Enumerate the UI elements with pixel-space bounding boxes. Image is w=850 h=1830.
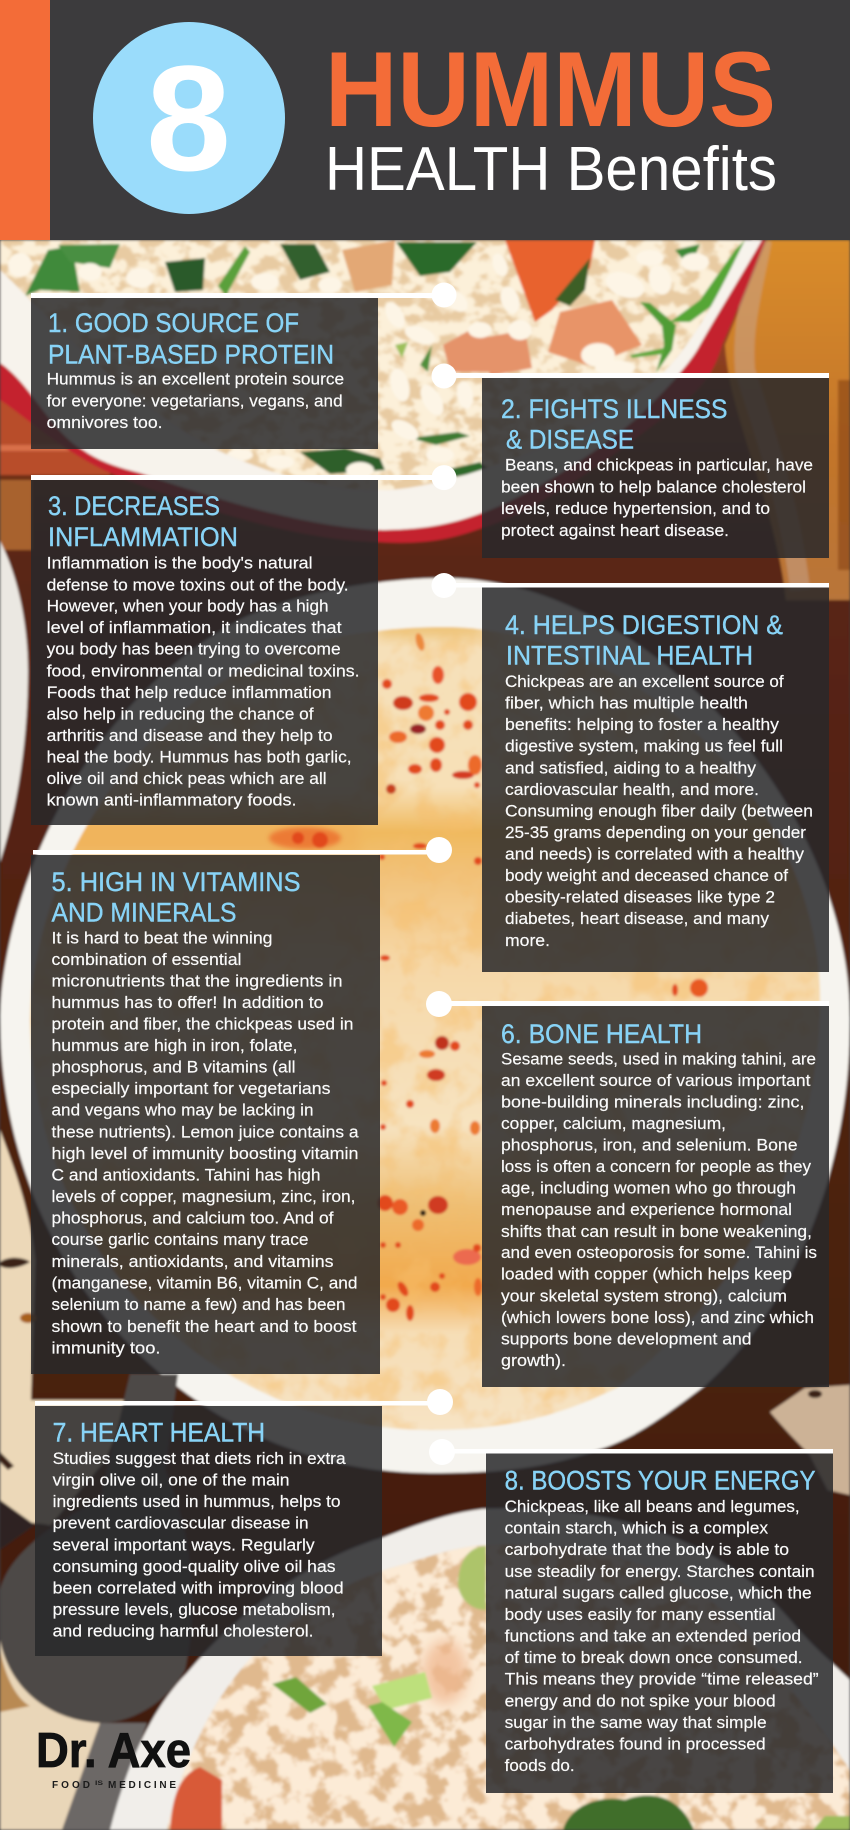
body text	[501, 1049, 817, 1370]
body text: especially important for vegetarians	[52, 1079, 330, 1098]
heading	[48, 491, 238, 552]
body text: levels of copper, magnesium, zinc, iron,	[52, 1187, 356, 1206]
body text: combination of essential	[52, 950, 241, 969]
logo: Dr. Axe food is medicine: FOOD	[52, 1780, 90, 1791]
body text: also help in reducing the chance of	[47, 704, 314, 723]
panel 3: decreases inflammation	[31, 465, 456, 825]
body text: However, when your body has a high	[47, 597, 329, 616]
heading: INFLAMMATION	[48, 522, 238, 552]
body text: minerals, antioxidants, and vitamins	[52, 1252, 334, 1271]
body text	[501, 456, 813, 540]
panel background	[31, 298, 378, 449]
title: HUMMUS: HUMMUS	[325, 29, 776, 149]
scallions	[272, 1677, 327, 1713]
body text: body weight and deceased chance of	[505, 866, 788, 885]
orange side bar	[0, 0, 50, 240]
body text: these nutrients). Lemon juice contains a	[52, 1122, 359, 1141]
body text: hummus are high in iron, folate,	[52, 1036, 298, 1055]
body text: pressure levels, glucose metabolism,	[53, 1600, 336, 1619]
body text: carbohydrate that the body is able to	[505, 1540, 789, 1559]
paprika flakes	[292, 632, 708, 1321]
body text: use steadily for energy. Starches contain	[505, 1562, 815, 1581]
body text: C and antioxidants. Tahini has high	[52, 1165, 320, 1184]
heading	[505, 610, 783, 671]
body text: growth).	[501, 1351, 566, 1370]
body text: of time to break down once consumed.	[505, 1648, 803, 1667]
body text: selenium to name a few) and has been	[52, 1295, 346, 1314]
body text: micronutrients that the ingredients in	[52, 971, 342, 990]
body text	[505, 1497, 819, 1775]
body text: menopause and experience hormonal	[501, 1200, 792, 1219]
body text: obesity-related diseases like type 2	[505, 888, 775, 907]
body text: contain starch, which is a complex	[505, 1518, 769, 1537]
body text: and satisfied, aiding to a healthy	[505, 758, 757, 777]
body text	[53, 1449, 346, 1641]
body text: functions and take an extended period	[505, 1626, 801, 1645]
panel background	[31, 480, 378, 825]
body text: protein and fiber, the chickpeas used in	[52, 1014, 354, 1034]
body text: body uses easily for many essential	[505, 1605, 776, 1624]
body text: immunity too.	[52, 1339, 160, 1358]
connector line and dot	[31, 465, 456, 490]
body text: 25-35 grams depending on your gender	[505, 823, 806, 842]
heading: 8. BOOSTS YOUR ENERGY	[505, 1466, 816, 1496]
body text: been shown to help balance cholesterol	[501, 478, 806, 496]
body text: Sesame seeds, used in making tahini, are	[501, 1049, 816, 1068]
body text: bone-building minerals including: zinc,	[501, 1092, 804, 1112]
body text: sugar in the same way that simple	[505, 1713, 767, 1732]
left red wood	[0, 400, 110, 550]
body text: course garlic contains many trace	[52, 1230, 308, 1249]
panel background	[486, 1453, 833, 1793]
body text: hummus has to offer! In addition to	[52, 993, 324, 1012]
panel background	[482, 587, 829, 972]
connector line and dot	[432, 364, 829, 388]
body text: and needs) is correlated with a healthy	[505, 844, 805, 864]
panel 4: helps digestion and intestinal health	[432, 573, 829, 972]
body text: several important ways. Regularly	[53, 1535, 315, 1554]
amber jar	[725, 240, 850, 600]
hummus bowl	[0, 578, 850, 1473]
body text: and reducing harmful cholesterol.	[53, 1622, 314, 1641]
body text	[47, 370, 344, 432]
body text: foods do.	[505, 1756, 575, 1775]
body text: It is hard to beat the winning	[52, 928, 272, 947]
body text: level of inflammation, it indicates that	[47, 618, 342, 637]
body text: high level of immunity boosting vitamin	[52, 1144, 358, 1163]
pita bread left	[0, 1130, 130, 1530]
body text: Foods that help reduce inflammation	[47, 683, 332, 702]
body text: (which lowers bone loss), and zinc which	[501, 1308, 814, 1327]
heading: 3. DECREASES	[48, 491, 220, 521]
connector line and dot	[429, 1439, 833, 1465]
body text: Beans, and chickpeas in particular, have	[505, 456, 813, 475]
panel background	[482, 1006, 829, 1387]
panel background	[31, 855, 380, 1374]
body text: heal the body. Hummus has both garlic,	[47, 748, 352, 766]
body text: protect against heart disease.	[501, 521, 729, 540]
body text: cardiovascular health, and more.	[505, 780, 759, 799]
heading: INTESTINAL HEALTH	[506, 641, 753, 671]
header background	[0, 0, 850, 240]
heading: 1. GOOD SOURCE OF	[48, 308, 299, 338]
number circle with 8	[93, 22, 285, 214]
body text: virgin olive oil, one of the main	[53, 1470, 290, 1489]
body text: you body has been trying to overcome	[47, 640, 341, 659]
heading: AND MINERALS	[52, 898, 236, 928]
body text: fiber, which has multiple health	[505, 694, 748, 713]
body text: loaded with copper (which helps keep	[501, 1265, 792, 1284]
couscous bowl	[110, 1509, 850, 1830]
body text: and even osteoporosis for some. Tahini is	[501, 1243, 817, 1262]
body text: Inflammation is the body's natural	[47, 554, 313, 573]
heading: 6. BONE HEALTH	[501, 1019, 702, 1049]
logo: Dr. Axe food is medicine: IS	[95, 1780, 104, 1787]
rice grains	[8, 250, 709, 478]
body text: (manganese, vitamin B6, vitamin C, and	[52, 1274, 358, 1292]
body text: This means they provide “time released”	[505, 1670, 819, 1689]
number circle with 8: 8	[146, 34, 231, 202]
connector line and dot	[432, 573, 829, 598]
body text: been correlated with improving blood	[53, 1578, 344, 1597]
body text: known anti-inflammatory foods.	[47, 791, 297, 810]
body text: supports bone development and	[501, 1329, 752, 1348]
body text: olive oil and chick peas which are all	[47, 769, 327, 788]
header band	[0, 0, 850, 240]
panel background	[35, 1406, 382, 1656]
body text: prevent cardiovascular disease in	[53, 1514, 309, 1533]
connector line and dot	[426, 991, 829, 1017]
body text	[52, 928, 359, 1358]
panel 8: boosts your energy	[429, 1439, 833, 1793]
body text: ingredients used in hummus, helps to	[53, 1492, 341, 1511]
body text: shown to benefit the heart and to boost	[52, 1317, 357, 1336]
body text: benefits: helping to foster a healthy	[505, 715, 780, 734]
body text: Consuming enough fiber daily (between	[505, 801, 813, 820]
body text: levels, reduce hypertension, and to	[501, 499, 770, 518]
body text: consuming good-quality olive oil has	[53, 1557, 336, 1576]
body text: loss is often a concern for people as they	[501, 1157, 811, 1176]
body text: Chickpeas, like all beans and legumes,	[505, 1497, 800, 1516]
body text: Studies suggest that diets rich in extra	[53, 1449, 346, 1468]
body text: Hummus is an excellent protein source	[47, 370, 344, 389]
cream table cloth bottom-left	[0, 1640, 147, 1830]
body text: Chickpeas are an excellent source of	[505, 672, 784, 691]
rice bowl	[0, 240, 765, 543]
heading	[501, 394, 728, 454]
body text: an excellent source of various important	[501, 1071, 811, 1090]
body text: arthritis and disease and they help to	[47, 726, 333, 745]
tomato pieces	[505, 240, 595, 322]
panel 7: heart health	[35, 1389, 453, 1656]
body text: age, including women who go through	[501, 1179, 796, 1198]
body text: and vegans who may be lacking in	[52, 1101, 314, 1120]
body text: phosphorus, iron, and selenium. Bone	[501, 1136, 798, 1155]
connector line and dot	[35, 1389, 453, 1415]
pita piece right	[770, 1385, 850, 1495]
body text: food, environmental or medicinal toxins.	[47, 661, 360, 680]
heading	[48, 308, 334, 370]
body text: phosphorus, and B vitamins (all	[52, 1058, 296, 1077]
panel 6: bone health	[426, 991, 829, 1387]
body text: for everyone: vegetarians, vegans, and	[47, 391, 343, 410]
panel background	[482, 378, 829, 558]
body text: copper, calcium, magnesium,	[501, 1114, 726, 1133]
heading: & DISEASE	[506, 424, 634, 454]
body text	[47, 554, 360, 810]
heading: 7. HEART HEALTH	[53, 1418, 265, 1448]
heading: 5. HIGH IN VITAMINS	[52, 867, 300, 897]
body text: energy and do not spike your blood	[505, 1692, 776, 1710]
body text: digestive system, making us feel full	[505, 737, 783, 756]
body text: your skeletal system strong), calcium	[501, 1286, 787, 1305]
white plate at left	[0, 541, 28, 862]
connector line and dot	[31, 282, 456, 308]
body text: shifts that can result in bone weakening,	[501, 1222, 812, 1241]
logo: Dr. Axe food is medicine: Dr. Axe	[36, 1724, 191, 1778]
tomato	[170, 1767, 222, 1830]
body text	[505, 672, 813, 950]
heading: PLANT-BASED PROTEIN	[48, 340, 334, 370]
heading	[52, 867, 300, 928]
body text: diabetes, heart disease, and many	[505, 909, 770, 928]
heading: 2. FIGHTS ILLNESS	[501, 394, 728, 424]
logo: Dr. Axe food is medicine: MEDICINE	[108, 1780, 176, 1791]
panel 5: high in vitamins and minerals	[31, 837, 452, 1374]
herbs	[563, 1795, 694, 1830]
body text: more.	[505, 931, 550, 950]
body text: omnivores too.	[47, 413, 163, 432]
body text: carbohydrates found in processed	[505, 1734, 766, 1753]
body text: defense to move toxins out of the body.	[47, 576, 349, 594]
panel 2: fights illness and disease	[432, 364, 829, 558]
herbs	[25, 246, 80, 296]
body text: natural sugars called glucose, which the	[505, 1584, 812, 1602]
connector line and dot	[33, 837, 452, 863]
body text: phosphorus, and calcium too. And of	[52, 1209, 334, 1228]
heading: 4. HELPS DIGESTION &	[505, 610, 783, 640]
spoon	[0, 1374, 192, 1723]
subtitle: HEALTH Benefits: HEALTH Benefits	[325, 135, 777, 204]
panel 1: good source of plant-based protein	[31, 282, 456, 449]
